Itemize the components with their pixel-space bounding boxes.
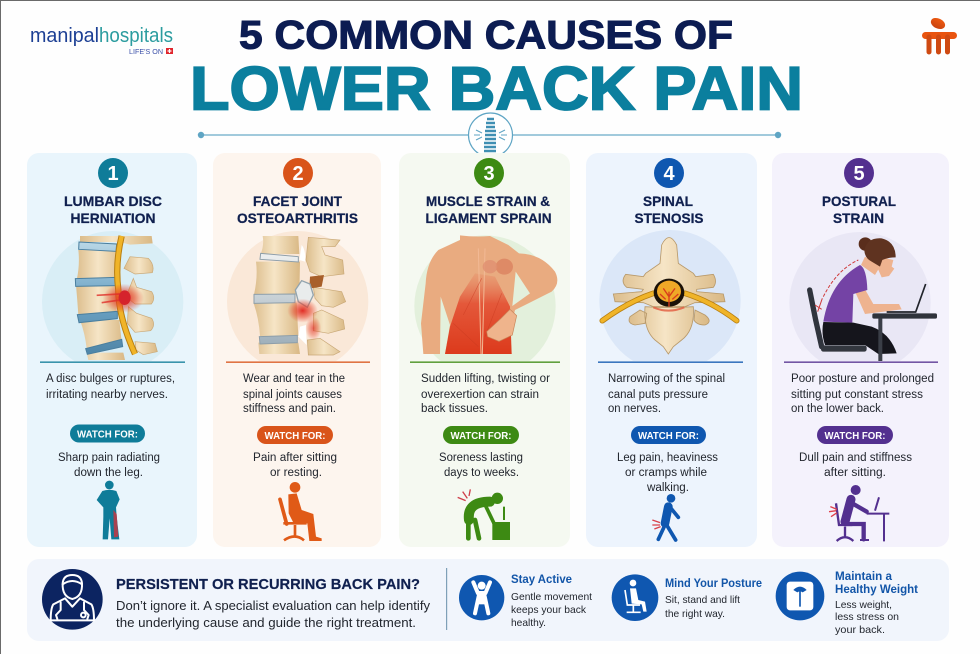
tip: stay active: Stay Active <box>511 574 572 586</box>
illustration: facet joint <box>227 231 368 372</box>
illustration: woman slouching at laptop <box>789 232 937 373</box>
logo: manipal hospitals: hospitals <box>99 24 173 47</box>
watch for pill <box>817 426 893 444</box>
watch for text <box>439 452 523 479</box>
panel: 1 lumbar disc herniation <box>27 153 197 547</box>
heading: SPINAL <box>643 193 693 209</box>
heading: HERNIATION <box>70 210 156 226</box>
icon: seated person <box>280 482 322 541</box>
title: LOWER BACK PAIN <box>190 54 803 122</box>
icon: standing person with leg pain <box>97 481 120 539</box>
watch for text: walking. <box>646 482 689 494</box>
heading: LUMBAR DISC <box>64 193 162 209</box>
rule <box>40 362 185 363</box>
watch for text: Leg pain, heaviness <box>617 452 718 464</box>
icon: walking person <box>652 494 678 540</box>
card background <box>213 153 381 547</box>
panel: 3 muscle strain and ligament sprain <box>399 153 570 547</box>
card background <box>27 153 197 547</box>
number badge: 3 <box>483 163 495 185</box>
bar background <box>27 559 949 641</box>
tip: stay active: Gentle movement <box>511 591 592 603</box>
tip: mind your posture: Sit, stand and lift <box>665 594 740 606</box>
tip: maintain a healthy weight: Maintain a <box>835 571 893 583</box>
heading <box>822 193 896 226</box>
card background <box>772 153 949 547</box>
watch for text: or resting. <box>270 467 322 479</box>
description <box>243 373 345 415</box>
heading: LIGAMENT SPRAIN <box>426 210 552 226</box>
callout text: the underlying cause and guide the right treatment. <box>116 615 416 630</box>
callout heading: PERSISTENT OR RECURRING BACK PAIN? <box>116 576 420 593</box>
callout text <box>116 598 430 630</box>
description: Sudden lifting, twisting or <box>421 373 550 385</box>
heading: POSTURAL <box>822 193 896 209</box>
heading: STENOSIS <box>634 210 704 226</box>
watch for text <box>799 452 912 479</box>
rule <box>410 362 560 363</box>
description <box>791 373 934 415</box>
description: back tissues. <box>421 403 488 415</box>
icon: doctor <box>42 569 103 630</box>
heading <box>64 193 162 226</box>
watch for text: after sitting. <box>824 467 886 479</box>
logo: orange emblem <box>922 16 957 52</box>
description: canal puts pressure <box>608 389 708 401</box>
watch for pill: WATCH FOR: <box>264 430 326 442</box>
watch for text: days to weeks. <box>444 467 519 479</box>
number badge <box>283 158 313 188</box>
rule <box>784 362 938 363</box>
tip: maintain a healthy weight <box>835 571 918 636</box>
title: 5 COMMON CAUSES OF <box>239 14 733 58</box>
icon: stay active <box>459 575 504 620</box>
description: Wear and tear in the <box>243 373 345 385</box>
tip: mind your posture: the right way. <box>665 608 725 620</box>
rule <box>598 362 743 363</box>
icon: person at desk <box>829 485 889 541</box>
watch for text: Soreness lasting <box>439 452 523 464</box>
icon: mind your posture <box>612 574 658 621</box>
tip: mind your posture <box>665 578 762 620</box>
number badge <box>844 158 874 188</box>
description: Narrowing of the spinal <box>608 373 725 385</box>
heading: MUSCLE STRAIN & <box>426 193 550 209</box>
panel: bottom advice bar <box>27 559 949 641</box>
watch for text: Pain after sitting <box>253 452 337 464</box>
title <box>190 14 803 122</box>
description: irritating nearby nerves. <box>46 389 168 401</box>
logo: manipal hospitals: manipal <box>30 24 99 47</box>
number badge: 4 <box>663 163 675 185</box>
description <box>608 373 725 415</box>
watch for text: Dull pain and stiffness <box>799 452 912 464</box>
number badge: 2 <box>292 163 304 185</box>
watch for pill: WATCH FOR: <box>77 428 138 440</box>
number badge <box>474 158 504 188</box>
description: stiffness and pain. <box>243 403 336 415</box>
heading: OSTEOARTHRITIS <box>237 210 358 226</box>
heading: STRAIN <box>833 210 884 226</box>
illustration: herniated disc <box>42 231 183 372</box>
callout text: Don’t ignore it. A specialist evaluation can help identify <box>116 598 430 613</box>
description: Poor posture and prolonged <box>791 373 934 385</box>
icon: weight scale <box>776 572 824 620</box>
panel: 4 spinal stenosis <box>586 153 757 547</box>
tip: maintain a healthy weight: your back. <box>835 624 885 636</box>
heading: FACET JOINT <box>253 193 342 209</box>
watch for text <box>58 452 160 479</box>
separator <box>446 568 447 630</box>
tip: maintain a healthy weight: less stress on <box>835 611 899 623</box>
heading <box>237 193 358 226</box>
description <box>421 373 550 415</box>
rule <box>226 362 370 363</box>
description <box>46 373 175 401</box>
watch for pill: WATCH FOR: <box>824 430 886 442</box>
tip: mind your posture: Mind Your Posture <box>665 578 762 590</box>
illustration: strained back <box>414 235 558 361</box>
description: on the lower back. <box>791 403 884 415</box>
number badge: 1 <box>107 163 119 185</box>
logo: manipal hospitals <box>30 24 173 56</box>
icon: person lifting box <box>458 489 510 540</box>
watch for pill <box>443 426 519 444</box>
number badge: 5 <box>853 163 865 185</box>
number badge <box>98 158 128 188</box>
watch for pill <box>631 426 706 444</box>
watch for text <box>253 452 337 479</box>
watch for text: down the leg. <box>74 467 143 479</box>
watch for text: or cramps while <box>625 467 707 479</box>
description: sitting put constant stress <box>791 389 923 401</box>
description: A disc bulges or ruptures, <box>46 373 175 385</box>
watch for text <box>617 452 718 494</box>
logo: manipal hospitals: LIFE'S ON <box>129 47 163 56</box>
description: spinal joints causes <box>243 389 342 401</box>
tip: maintain a healthy weight: Healthy Weight <box>835 584 918 596</box>
watch for pill: WATCH FOR: <box>638 430 699 442</box>
panel: 2 facet joint osteoarthritis <box>213 153 381 547</box>
card background <box>399 153 570 547</box>
watch for pill <box>257 426 333 444</box>
heading <box>634 193 704 226</box>
description: on nerves. <box>608 403 661 415</box>
watch for pill: WATCH FOR: <box>450 430 512 442</box>
tip: stay active: keeps your back <box>511 604 587 616</box>
description: overexertion can strain <box>421 389 539 401</box>
panel: 5 postural strain <box>772 153 949 547</box>
watch for pill <box>70 424 145 442</box>
tip: maintain a healthy weight: Less weight, <box>835 599 892 611</box>
title divider with spine emblem <box>198 113 781 157</box>
heading <box>426 193 552 226</box>
card background <box>586 153 757 547</box>
number badge <box>654 158 684 188</box>
tip: stay active: healthy. <box>511 617 546 629</box>
illustration: vertebra cross-section <box>599 230 741 371</box>
tip: stay active <box>511 574 592 629</box>
watch for text: Sharp pain radiating <box>58 452 160 464</box>
